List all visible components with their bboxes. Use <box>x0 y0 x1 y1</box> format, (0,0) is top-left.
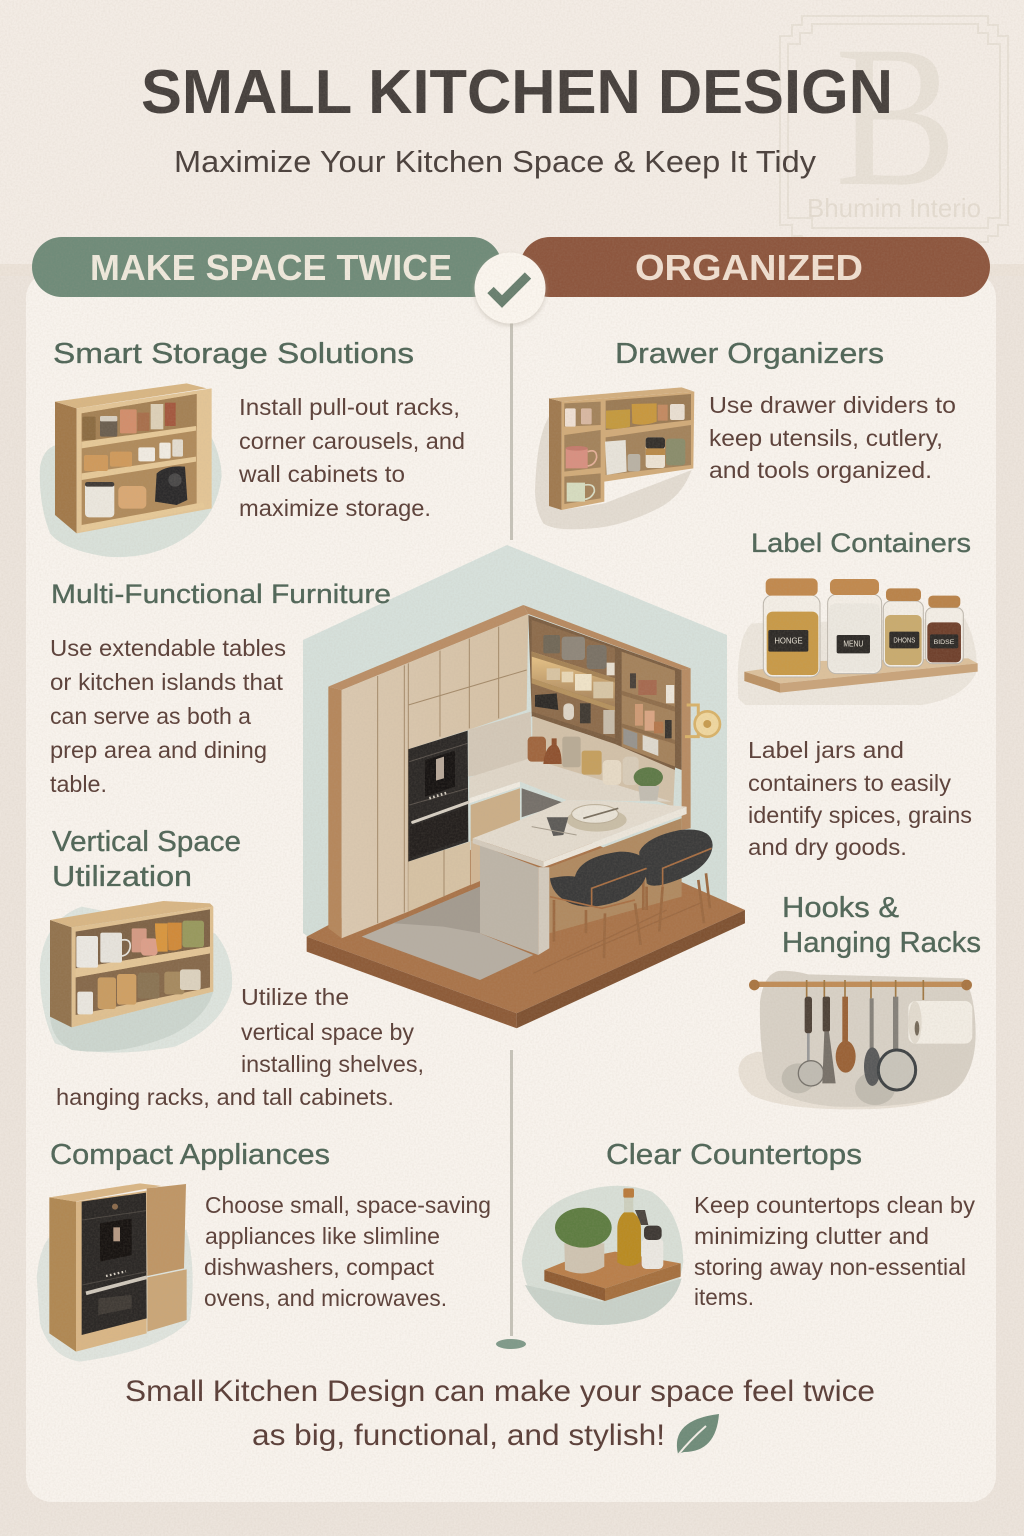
text: label containers body: and dry goods. <box>748 834 907 860</box>
illustration: countertop board with plant and bottles <box>522 1186 683 1325</box>
text: multi-functional body: can serve as both a <box>50 703 252 729</box>
illustration: compact oven cabinet <box>37 1183 193 1362</box>
panel: clear countertops <box>522 1139 975 1325</box>
text: label containers body: containers to easily <box>748 770 951 796</box>
text: clear countertops body: storing away non-essential <box>694 1254 966 1280</box>
wall cabinet fronts <box>328 605 691 938</box>
heading: label containers: Label Containers <box>751 528 971 558</box>
text: vertical space body: installing shelves, <box>241 1051 424 1077</box>
banner: organized <box>520 237 990 297</box>
title: SMALL KITCHEN DESIGN <box>141 58 893 127</box>
heading: compact appliances: Compact Appliances <box>50 1139 330 1171</box>
banner: make space twice: MAKE SPACE TWICE <box>90 247 452 288</box>
panel: multi-functional furniture <box>50 579 391 797</box>
icon: leaf <box>677 1414 719 1455</box>
banner: organized: ORGANIZED <box>635 247 863 288</box>
text: vertical space body: Utilize the <box>241 984 349 1010</box>
heading: hooks and hanging racks: Hooks & <box>782 892 899 924</box>
text: compact appliances body: dishwashers, compact <box>204 1254 434 1280</box>
text: vertical space body: vertical space by <box>241 1019 414 1045</box>
text: multi-functional body <box>50 635 286 797</box>
banner: make space twice <box>32 237 502 297</box>
chair right <box>639 829 713 932</box>
text: smart storage body: Install pull-out racks, <box>239 394 460 420</box>
illustration: labelled jars on shelf: MENU <box>843 640 864 649</box>
shelving wall <box>528 615 682 770</box>
text: compact appliances body <box>204 1192 491 1311</box>
text: multi-functional body: or kitchen islands that <box>50 669 283 695</box>
chair left <box>550 852 647 958</box>
text: drawer organizers body: Use drawer dividers to <box>709 392 956 418</box>
footer message <box>125 1375 875 1452</box>
text: compact appliances body: ovens, and microwaves. <box>204 1285 447 1311</box>
illustration: labelled jars on shelf <box>738 578 978 705</box>
subtitle: Maximize Your Kitchen Space & Keep It Tidy <box>174 144 817 179</box>
panel: hooks and hanging racks <box>738 892 981 1109</box>
illustration: vertical wall shelf <box>40 901 232 1053</box>
watermark logo: Bhumim Interio <box>807 193 981 223</box>
text: label containers body: identify spices, grains <box>748 802 972 828</box>
text: multi-functional body: prep area and dining <box>50 737 267 763</box>
wall sconce <box>685 705 720 737</box>
text: clear countertops body: Keep countertops clean by <box>694 1192 975 1218</box>
footer message: as big, functional, and stylish! <box>252 1419 665 1452</box>
heading: clear countertops: Clear Countertops <box>606 1139 862 1171</box>
heading: vertical space utilization <box>52 826 241 893</box>
watermark logo: B <box>835 4 957 228</box>
illustration: drawer organizer shelf <box>535 387 694 529</box>
heading: hooks and hanging racks <box>782 892 981 959</box>
text: smart storage body: corner carousels, and <box>239 428 465 454</box>
panel: vertical space utilization <box>40 826 424 1110</box>
text: compact appliances body: appliances like slimline <box>205 1223 440 1249</box>
concrete floor <box>362 887 533 980</box>
text: compact appliances body: Choose small, space-saving <box>205 1192 491 1218</box>
illustration: labelled jars on shelf: HONGE <box>774 636 803 645</box>
text: drawer organizers body: and tools organized. <box>709 457 932 483</box>
panel: compact appliances <box>37 1139 491 1362</box>
illustration: labelled jars on shelf: BIDSE <box>934 639 955 646</box>
illustration: labelled jars on shelf: DHONS <box>893 636 915 645</box>
text: smart storage body <box>238 394 465 521</box>
wood floor platform <box>307 817 745 1028</box>
counters <box>469 758 687 955</box>
illustration: hanging rail with utensils and paper towel <box>738 971 976 1109</box>
text: clear countertops body: minimizing clutter and <box>694 1223 929 1249</box>
text: label containers body <box>748 737 972 860</box>
illustration: isometric kitchen <box>303 545 745 1028</box>
text: drawer organizers body <box>709 392 956 483</box>
backsplash <box>468 712 675 807</box>
text: vertical space body <box>56 984 424 1110</box>
watermark logo <box>780 4 1008 242</box>
text: smart storage body: maximize storage. <box>239 495 431 521</box>
icon: check mark badge <box>474 252 546 326</box>
center divider bottom <box>496 1050 526 1349</box>
heading: vertical space utilization: Vertical Space <box>52 826 241 858</box>
plates and cup <box>532 805 627 836</box>
text: drawer organizers body: keep utensils, cutlery, <box>709 425 943 451</box>
heading: smart storage solutions: Smart Storage Solutions <box>53 338 414 370</box>
text: clear countertops body: items. <box>694 1284 754 1310</box>
heading: hooks and hanging racks: Hanging Racks <box>782 927 981 959</box>
panel: drawer organizers <box>535 338 956 529</box>
footer message: Small Kitchen Design can make your space feel twice <box>125 1375 875 1408</box>
text: vertical space body: hanging racks, and tall cabinets. <box>56 1084 394 1110</box>
illustration: wooden storage shelf <box>40 383 222 557</box>
mint house backdrop <box>303 545 727 965</box>
center divider top <box>510 320 513 540</box>
heading: multi-functional furniture: Multi-Functional Furniture <box>51 579 391 609</box>
countertop jars and plant <box>528 737 663 801</box>
text: label containers body: Label jars and <box>748 737 904 763</box>
built-in oven <box>408 731 468 862</box>
text: multi-functional body: table. <box>50 771 107 797</box>
panel: label containers <box>738 528 978 860</box>
heading: vertical space utilization: Utilization <box>52 861 192 893</box>
text: multi-functional body: Use extendable tables <box>50 635 286 661</box>
text: smart storage body: wall cabinets to <box>238 461 405 487</box>
heading: drawer organizers: Drawer Organizers <box>615 338 884 370</box>
panel: smart storage solutions <box>40 338 465 557</box>
text: clear countertops body <box>694 1192 975 1310</box>
